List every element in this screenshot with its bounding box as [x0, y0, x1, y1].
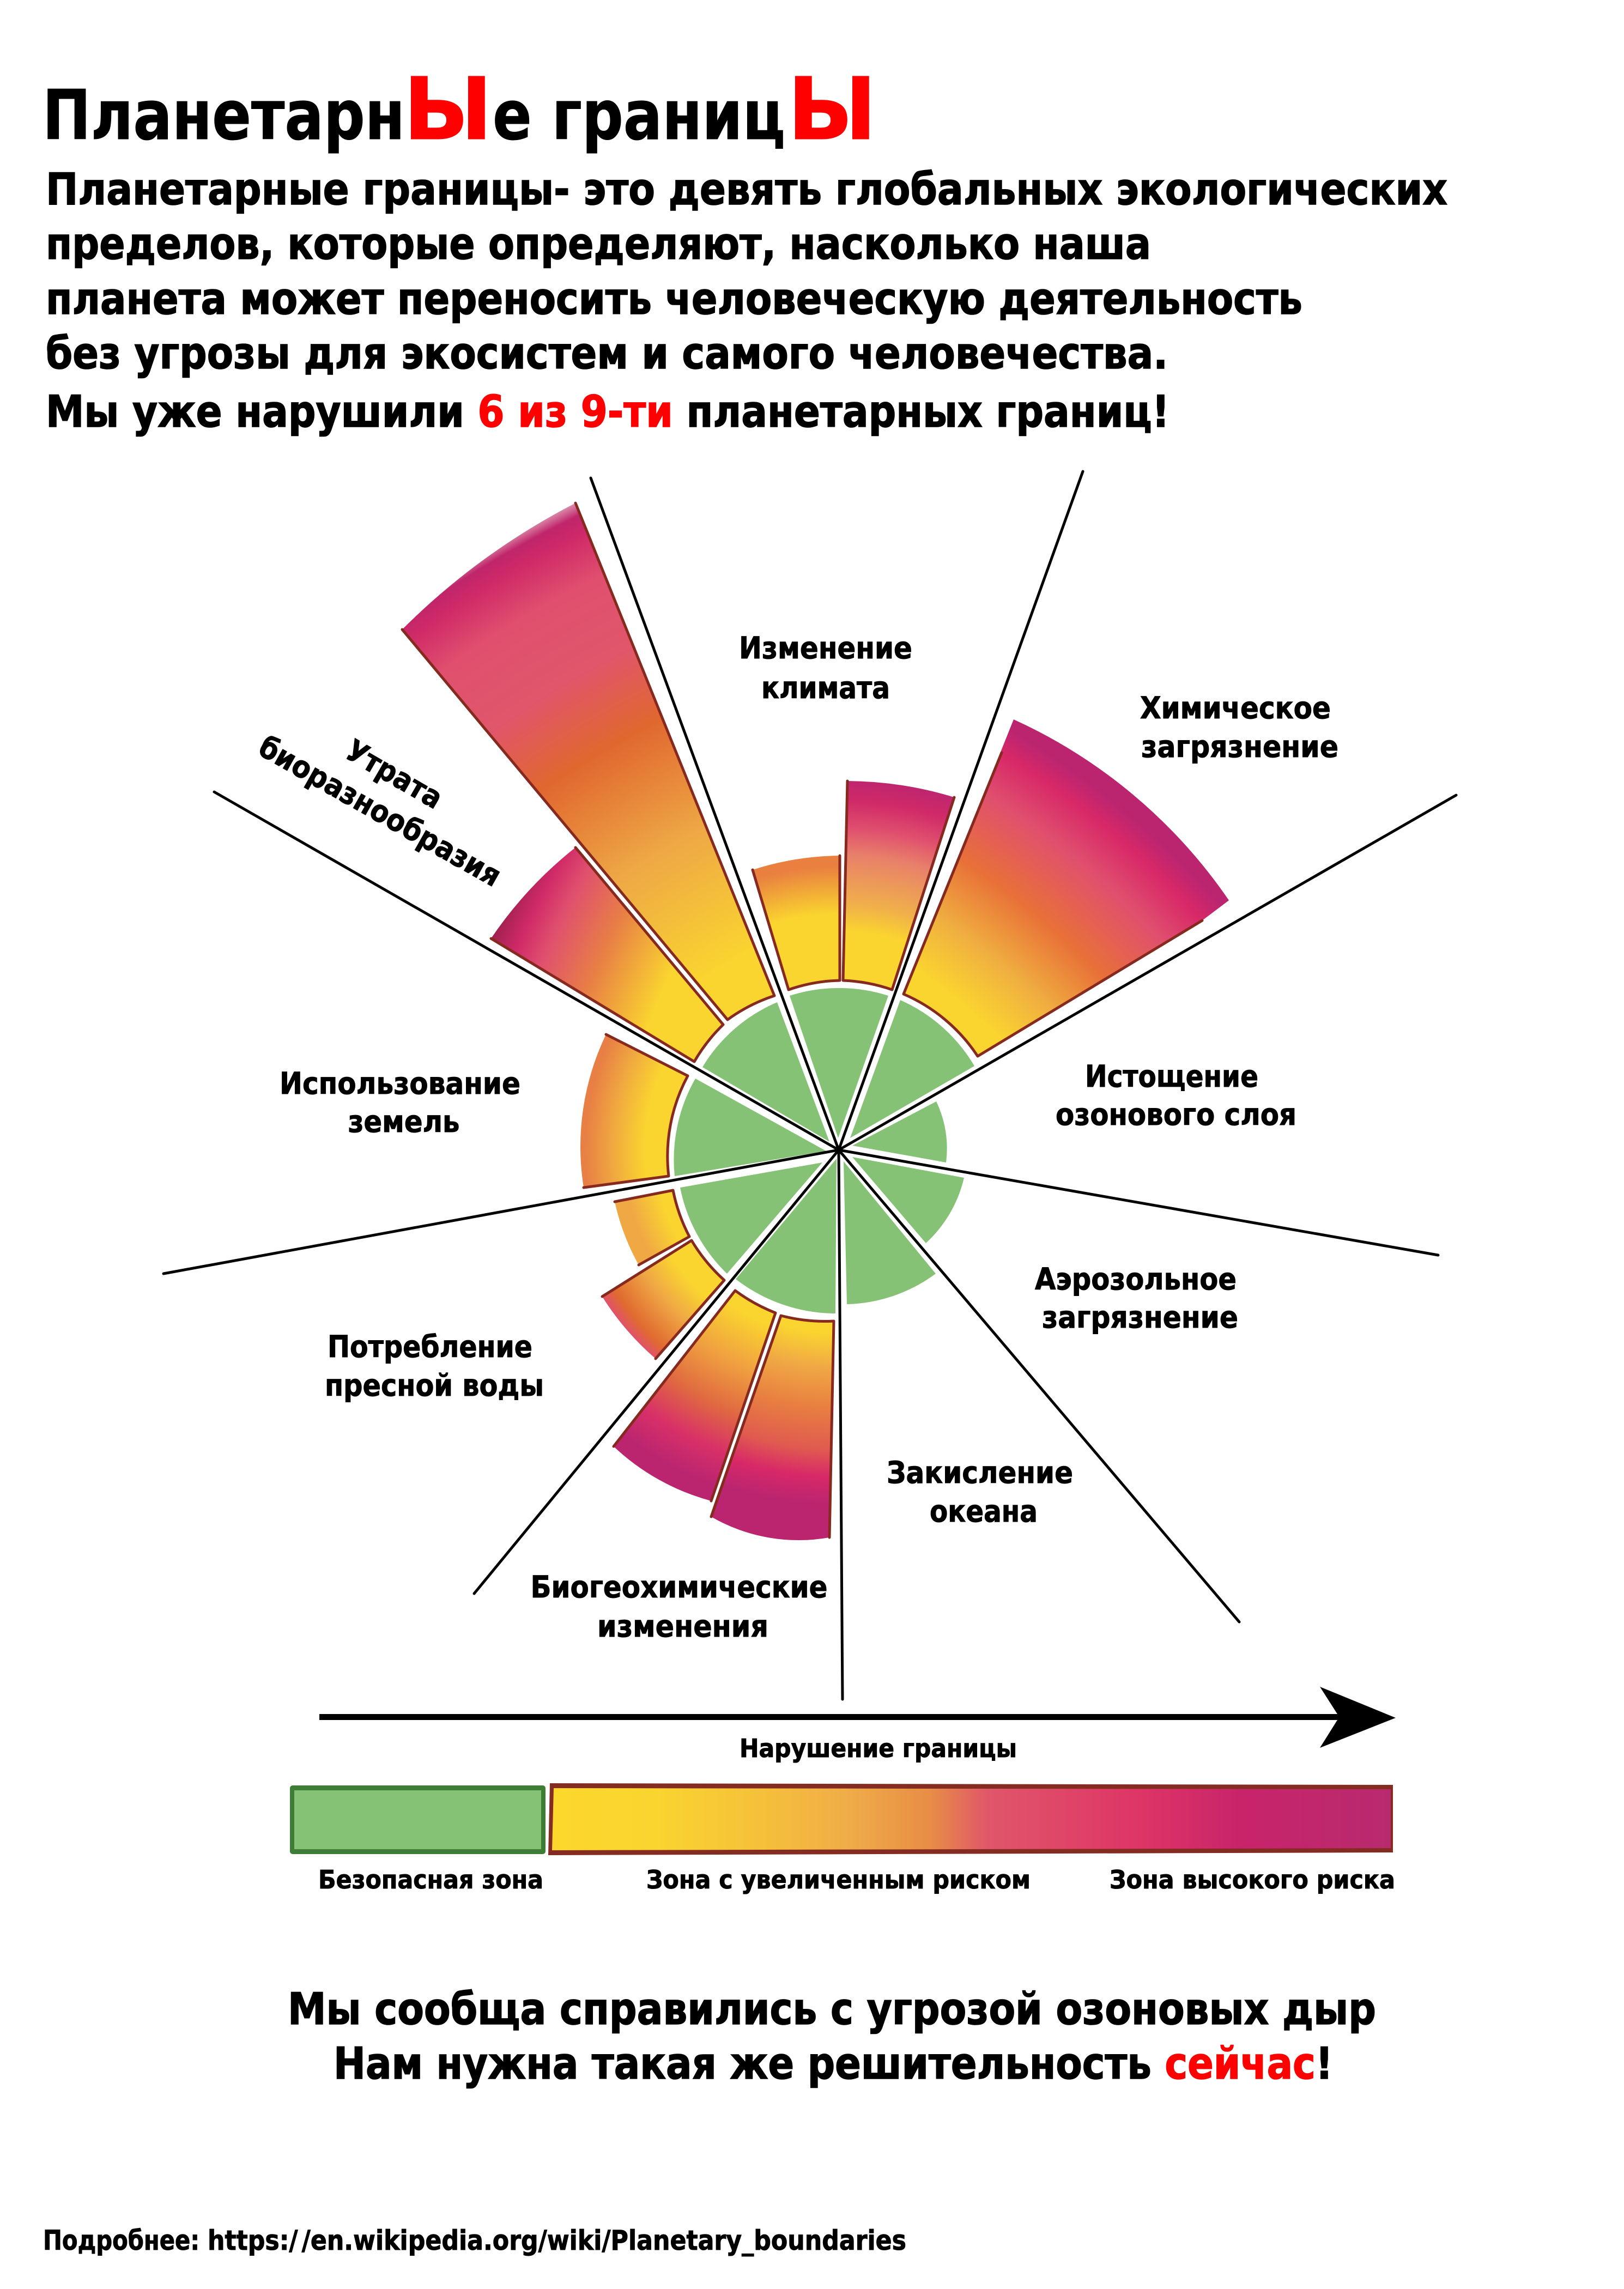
arrow: boundary transgression — [319, 1687, 1396, 1748]
label: aerosol pollution — [1035, 1262, 1238, 1335]
sector: biogeochemical left — [614, 1291, 775, 1501]
title — [43, 59, 877, 160]
closing call to action: Нам нужна такая же решительность сейчас! — [334, 2038, 1333, 2089]
sector: freshwater lower — [602, 1240, 724, 1359]
title: е границ — [493, 75, 785, 155]
label: land use: земель — [348, 1104, 460, 1139]
closing call to action — [288, 1984, 1376, 2089]
label: freshwater use: Потребление — [328, 1329, 532, 1364]
radial divider lines — [163, 471, 1456, 1699]
safe zone green sectors — [674, 988, 974, 1313]
legend label: increased risk: Зона с увеличенным риском — [646, 1865, 1031, 1894]
intro text block: Планетарные границы- это девять глобальных экологических — [46, 164, 1447, 215]
label: freshwater use: пресной воды — [325, 1368, 544, 1403]
label: ocean acidification — [887, 1455, 1073, 1529]
label: freshwater use — [325, 1329, 544, 1403]
title: Планетарн — [43, 75, 405, 155]
label: biodiversity loss: биоразнообразия — [253, 729, 507, 893]
label: chemical pollution — [1140, 691, 1338, 764]
label: aerosol pollution: Аэрозольное — [1035, 1262, 1237, 1297]
closing call to action: Мы сообща справились с угрозой озоновых дыр — [288, 1984, 1376, 2034]
label: land use — [280, 1066, 520, 1139]
label: climate change: климата — [761, 670, 890, 705]
label: climate change — [739, 631, 912, 705]
label: aerosol pollution: загрязнение — [1042, 1300, 1238, 1335]
intro text block — [46, 164, 1447, 437]
label: chemical pollution: Химическое — [1140, 691, 1331, 725]
planetary boundaries radial chart — [163, 471, 1456, 1699]
legend: safe zone bar — [290, 1785, 546, 1854]
intro text block: планета может переносить человеческую деятельность — [46, 274, 1302, 324]
legend label: safe: Безопасная зона — [318, 1865, 543, 1894]
sector: biodiversity small — [491, 847, 723, 1062]
footer source link: Подробнее: — [43, 2225, 199, 2256]
label: ozone depletion: озонового слоя — [1056, 1097, 1296, 1132]
intro text block: пределов, которые определяют, насколько наша — [46, 219, 1151, 269]
intro text block: Мы уже нарушили 6 из 9-ти планетарных границ! — [46, 386, 1169, 437]
legend label: high risk: Зона высокого риска — [1110, 1865, 1395, 1894]
label: land use: Использование — [280, 1066, 520, 1101]
label: climate change: Изменение — [739, 631, 912, 665]
label: biogeochemical changes: изменения — [597, 1609, 768, 1644]
label: biogeochemical changes: Биогеохимические — [531, 1570, 827, 1604]
sector: freshwater upper — [615, 1190, 689, 1265]
sector: land use — [580, 1034, 688, 1188]
sector: climate left — [753, 856, 840, 990]
sector: biodiversity large — [402, 503, 774, 1020]
label: biogeochemical changes — [531, 1570, 827, 1644]
arrow label: Нарушение границы — [740, 1734, 1017, 1763]
label: ocean acidification: Закисление — [887, 1455, 1073, 1490]
sector: chemical pollution — [904, 719, 1229, 1056]
sector: biogeochemical right — [711, 1316, 834, 1540]
title: Ы — [787, 59, 877, 160]
label: ocean acidification: океана — [930, 1494, 1038, 1529]
label: ozone depletion — [1056, 1059, 1296, 1132]
label: chemical pollution: загрязнение — [1141, 729, 1338, 764]
intro text block: без угрозы для экосистем и самого человечества. — [46, 328, 1168, 379]
legend: risk gradient bar — [548, 1783, 1393, 1855]
footer source link: https://en.wikipedia.org/wiki/Planetary_boundaries — [208, 2225, 906, 2256]
label: ozone depletion: Истощение — [1085, 1059, 1258, 1094]
title: Ы — [403, 59, 493, 160]
label: biodiversity loss: Утрата — [340, 732, 449, 816]
sector: climate right — [843, 781, 954, 990]
